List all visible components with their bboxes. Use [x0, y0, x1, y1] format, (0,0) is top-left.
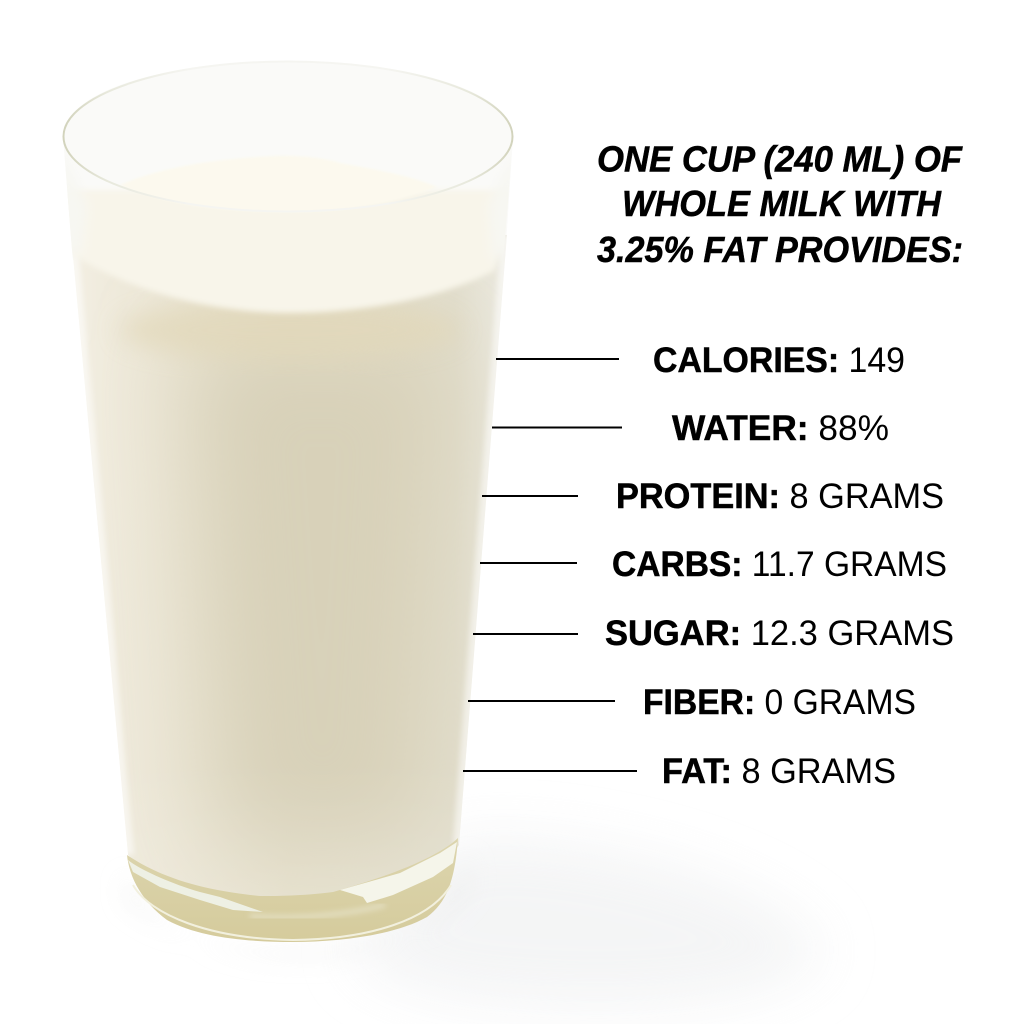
nutrient: fiber: FIBER: 0 GRAMS: [643, 683, 916, 722]
glass base highlights: [128, 860, 263, 912]
milk body: [71, 235, 507, 900]
table shadow: [355, 838, 825, 1008]
heading: ONE CUP (240 ML) OF: [597, 138, 963, 180]
nutrient: protein: PROTEIN: 8 GRAMS: [616, 477, 944, 516]
lighter lower milk: [100, 760, 480, 900]
base reflection band: [250, 905, 385, 917]
heading: WHOLE MILK WITH: [622, 183, 942, 224]
milk dark core: [190, 340, 450, 850]
heading: [597, 138, 963, 270]
contact shadow under glass: [125, 850, 470, 958]
nutrient: calories: CALORIES: 149: [653, 341, 905, 380]
glass base: [127, 838, 458, 942]
warm band below surface: [122, 306, 440, 352]
glass edge sheen: [71, 235, 507, 855]
nutrient: sugar: SUGAR: 12.3 GRAMS: [605, 614, 954, 653]
nutrient: fat: FAT: 8 GRAMS: [662, 752, 896, 791]
milk top surface: [120, 156, 437, 212]
glass of milk: [60, 61, 825, 1008]
nutrient: water: WATER: 88%: [672, 409, 889, 448]
infographic canvas: [62, 60, 963, 988]
milk surface seen through glass: [68, 191, 505, 316]
glass rim: [64, 62, 512, 212]
glass wall strip right: [498, 235, 505, 250]
nutrient: carbs: CARBS: 11.7 GRAMS: [612, 545, 947, 584]
milk base tone: [71, 235, 507, 898]
glass upper wall: [63, 61, 513, 260]
nutrient leader lines: [463, 359, 637, 771]
glass wall strip left: [60, 150, 88, 256]
heading: 3.25% FAT PROVIDES:: [597, 229, 963, 270]
base outer rim: [133, 885, 451, 940]
